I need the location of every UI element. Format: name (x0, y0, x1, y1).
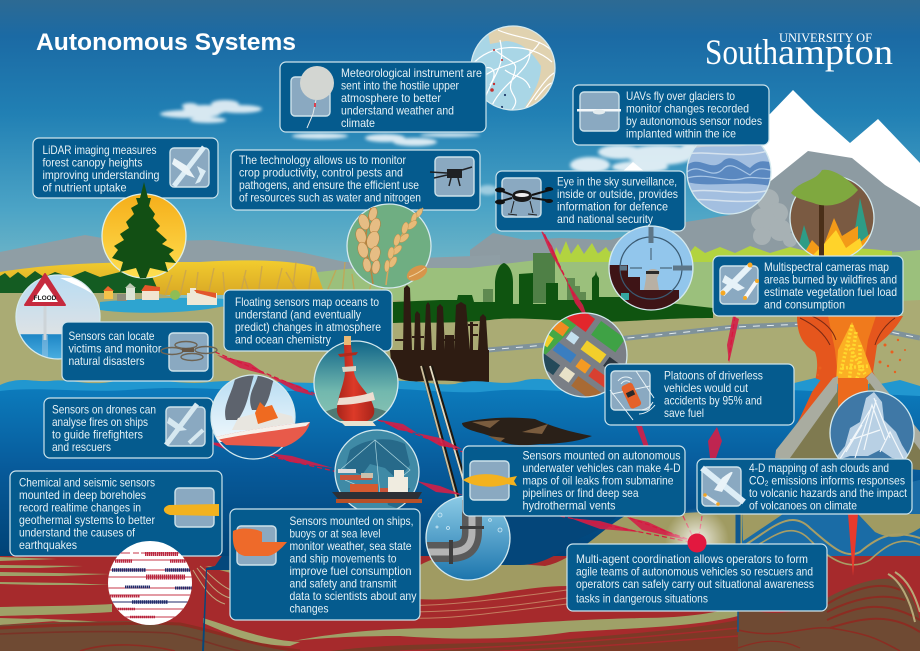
text: geothermal: geothermal systems to better (19, 513, 155, 527)
text: ship fire drones: analyse fires on ships (52, 415, 148, 429)
text: geothermal: mounted in deep boreholes (19, 488, 146, 502)
text: disaster sensors: victims and monitor (68, 342, 162, 356)
wheat stalks (165, 262, 385, 296)
coordination node (688, 534, 706, 552)
seabed olive (205, 510, 742, 600)
rock strata (0, 508, 920, 651)
text: underwater vehicles: maps of oil leaks from submarine (522, 474, 674, 488)
icon: fire drone plane (166, 404, 205, 446)
icon: driverless car (610, 371, 655, 420)
icon: UAV (577, 92, 621, 131)
tree on fire (791, 170, 858, 257)
circle: forest canopy (102, 182, 186, 278)
text: multispectral: estimate vegetation fuel load (764, 285, 897, 299)
olive ground (0, 293, 920, 400)
icon: LiDAR plane (170, 147, 209, 187)
circle outline: weather map (471, 26, 555, 110)
circle: flood scene (16, 274, 100, 360)
ship hull (216, 402, 310, 447)
panel: disaster sensors (62, 322, 217, 381)
text: crop technology: crop productivity, control pests and (239, 166, 403, 180)
text: multispectral: and consumption (764, 298, 845, 312)
text: platoons: save fuel (664, 406, 704, 420)
text: multi-agent: tasks in dangerous situations (576, 592, 708, 606)
text: multi-agent (576, 552, 814, 606)
text: multispectral: areas burned by wildfires and (764, 272, 897, 286)
text: UAV (626, 89, 762, 140)
circle: wheat (347, 204, 431, 288)
road (488, 324, 920, 350)
icon: autonomous underwater vehicle (463, 461, 517, 500)
circle: ship on fire (211, 375, 310, 462)
text: geothermal: record realtime changes in (19, 500, 141, 514)
text: meteorological: climate (341, 116, 375, 130)
panel: geothermal boreholes (10, 471, 222, 556)
wheat ears (354, 206, 430, 285)
right brown fold (738, 579, 920, 651)
text: underwater vehicles: hydrothermal vents (522, 498, 616, 512)
text: floating sensors: predict) changes in atmosphere (235, 320, 381, 334)
panel: ship fire drones (44, 398, 213, 458)
circle: global shipping (332, 430, 422, 514)
brown bottom (0, 621, 290, 651)
bottom deep layers (330, 620, 738, 651)
circle: wildfire (790, 170, 874, 260)
text: LiDAR: of nutrient uptake (42, 180, 127, 194)
icon: sensor ship (233, 526, 287, 565)
volcano cone (775, 372, 920, 470)
text: geothermal (19, 476, 155, 552)
text: underwater vehicles: Sensors mounted on autonomous (522, 448, 680, 462)
text: meteorological (341, 66, 482, 130)
buoy body (337, 336, 376, 426)
panel: multispectral wildfire (713, 256, 903, 316)
left olive streaks (0, 557, 112, 625)
panel: surveillance (495, 171, 685, 231)
panel: UAV glaciers (573, 85, 769, 145)
circle: glider plume over volcano (829, 390, 915, 458)
icon: flood sign: FLOOD (34, 295, 57, 302)
text: underwater vehicles: pipelines or find deep sea (522, 486, 639, 500)
text: ship sensors: improve fuel consumption (290, 564, 412, 578)
right olive wedge (742, 508, 792, 541)
text: surveillance: information for defence (557, 200, 668, 214)
sky background (0, 0, 920, 300)
text: ship fire drones (52, 402, 156, 454)
panel: LiDAR forest (33, 138, 218, 198)
text: platoons: Platoons of driverless (664, 368, 763, 382)
text: multi-agent: operators can safely carry out situational awareness (576, 577, 814, 591)
text: floating sensors: and ocean chemistry (235, 332, 331, 346)
coordination node glow (665, 508, 729, 572)
logo: University of Southampton: UNIVERSITY OF (779, 31, 872, 45)
bright grass strip (553, 241, 892, 262)
text: geothermal: earthquakes (19, 538, 77, 552)
panel: floating sensors (224, 290, 392, 351)
icon: rescue drone (161, 333, 217, 371)
icon: volcano plane (702, 467, 744, 506)
logo: University of Southampton: South (705, 32, 778, 72)
panel: driverless platoons (605, 364, 794, 425)
text: geothermal: understand the causes of (19, 526, 136, 540)
icon: fir tree (112, 182, 176, 278)
text: volcano mapping (749, 461, 908, 512)
text: floating sensors (235, 295, 381, 346)
text: ship sensors: changes (290, 602, 328, 616)
deep sea trench (202, 556, 230, 651)
text: underwater vehicles: underwater vehicles can make 4-D (522, 461, 681, 475)
text: LiDAR: forest canopy heights (42, 156, 142, 170)
text: meteorological: sent into the hostile upper (341, 78, 459, 92)
text: crop technology (239, 153, 421, 204)
text: ship fire drones: to guide firefighters (52, 428, 143, 442)
text: UAV: by autonomous sensor nodes (626, 114, 762, 128)
light green field right (300, 250, 920, 340)
icon: borehole sensor (164, 488, 219, 527)
text: volcano mapping: 4-D mapping of ash clouds and (749, 461, 889, 475)
text: UAV: UAVs fly over glaciers to (626, 89, 735, 103)
text: disaster sensors: Sensors can locate (68, 329, 155, 343)
text: ship sensors: Sensors mounted on ships, (290, 514, 414, 528)
grey mountain range left (0, 235, 500, 285)
smoke plume (751, 189, 797, 247)
sea (0, 378, 920, 570)
text: ship sensors: buoys or at sea level (290, 526, 380, 540)
text: crop technology: pathogens, and ensure the efficient use (239, 178, 419, 192)
small far peak (622, 162, 645, 172)
text: ship sensors (290, 514, 416, 616)
title: Autonomous Systems (36, 29, 296, 56)
icon: quadcopter (495, 178, 553, 217)
panel: meteorological instruments (280, 62, 486, 132)
text: multispectral: Multispectral cameras map (764, 260, 889, 274)
text: LiDAR (42, 143, 160, 194)
text: floating sensors: Floating sensors map oceans to (235, 295, 379, 309)
text: surveillance (557, 174, 678, 226)
text: platoons: vehicles would cut (664, 381, 749, 395)
curved strata right of seismic circle (193, 566, 236, 604)
text: volcano mapping: of volcanoes on climate (749, 498, 857, 512)
text: crop technology: The technology allows us to monitor (239, 153, 406, 167)
vents fault line (736, 514, 740, 632)
sea floor basin (463, 516, 617, 565)
text: meteorological: understand weather and (341, 104, 454, 118)
text: surveillance: and national security (557, 212, 653, 226)
panel: volcano mapping (697, 459, 912, 514)
text: ship sensors: and ship movements to (290, 552, 397, 566)
text: ship sensors: monitor weather, sea state (290, 539, 412, 553)
text: geothermal: Chemical and seismic sensors (19, 476, 155, 490)
text: multi-agent: Multi-agent coordination allows operators to form (576, 552, 808, 566)
volcano lava (778, 316, 906, 452)
text: LiDAR: improving understanding (42, 168, 160, 182)
text: crop technology: of resources such as water and nitrogen (239, 190, 421, 204)
panel: ship sensors (230, 509, 420, 620)
logo: University of Southampton (705, 31, 893, 72)
text: ship fire drones: Sensors on drones can (52, 402, 156, 416)
circle: seismograph (108, 541, 192, 625)
text: multi-agent: agile teams of autonomous vehicles so rescuers and (576, 564, 813, 578)
centre olive band (293, 606, 738, 641)
dashed beam lines (208, 227, 735, 542)
text: surveillance: Eye in the sky surveillance, (557, 174, 677, 188)
text: meteorological: atmosphere to better (341, 91, 441, 105)
snow mountains (745, 90, 920, 240)
text: ship sensors: data to scientists about any (290, 589, 416, 603)
text: disaster sensors (68, 329, 162, 368)
yellow fields (0, 260, 325, 295)
text: disaster sensors: natural disasters (68, 354, 144, 368)
village and lake (100, 283, 240, 313)
circle: ocean buoy (313, 336, 399, 426)
logo: University of Southampton: ampton (778, 32, 893, 72)
panel: crop technology (231, 150, 480, 210)
oil slick (462, 418, 592, 445)
panel: underwater vehicles (463, 446, 685, 516)
text: underwater vehicles (522, 448, 681, 512)
text: floating sensors: understand (and eventually (235, 308, 361, 322)
grey mountain range right (470, 151, 920, 270)
clouds (160, 100, 700, 195)
text: multispectral (764, 260, 897, 312)
text: meteorological: Meteorological instrument are (341, 66, 482, 80)
volcano flow over sea (775, 378, 838, 455)
text: ship sensors: and safety and transmit (290, 576, 397, 590)
circle: sniper scope (609, 226, 693, 310)
text: LiDAR: LiDAR imaging measures (42, 143, 156, 157)
text: surveillance: inside or outside, provides (557, 187, 678, 201)
city skyline (393, 253, 713, 323)
container ship (332, 469, 422, 503)
text: UAV: monitor changes recorded (626, 102, 749, 116)
volcano beam (848, 514, 858, 576)
dark forest strip (0, 271, 158, 296)
icon: weather balloon (291, 66, 334, 128)
circle: glacier (686, 146, 772, 215)
circle: traffic platoon (542, 312, 628, 398)
oil refinery silhouette (390, 285, 489, 382)
text: UAV: implanted within the ice (626, 126, 736, 140)
icon: agricultural drone (430, 157, 474, 196)
text: platoons: accidents by 95% and (664, 394, 762, 408)
circle: weather map (472, 26, 554, 110)
oil rig pipes (421, 366, 466, 500)
circle: pipeline (424, 496, 510, 580)
icon: multispectral plane (720, 262, 759, 304)
red signal beams (207, 224, 739, 540)
text: platoons (664, 368, 763, 420)
text: ship fire drones: and rescuers (52, 440, 111, 454)
panel: multi-agent coordination (567, 544, 827, 611)
